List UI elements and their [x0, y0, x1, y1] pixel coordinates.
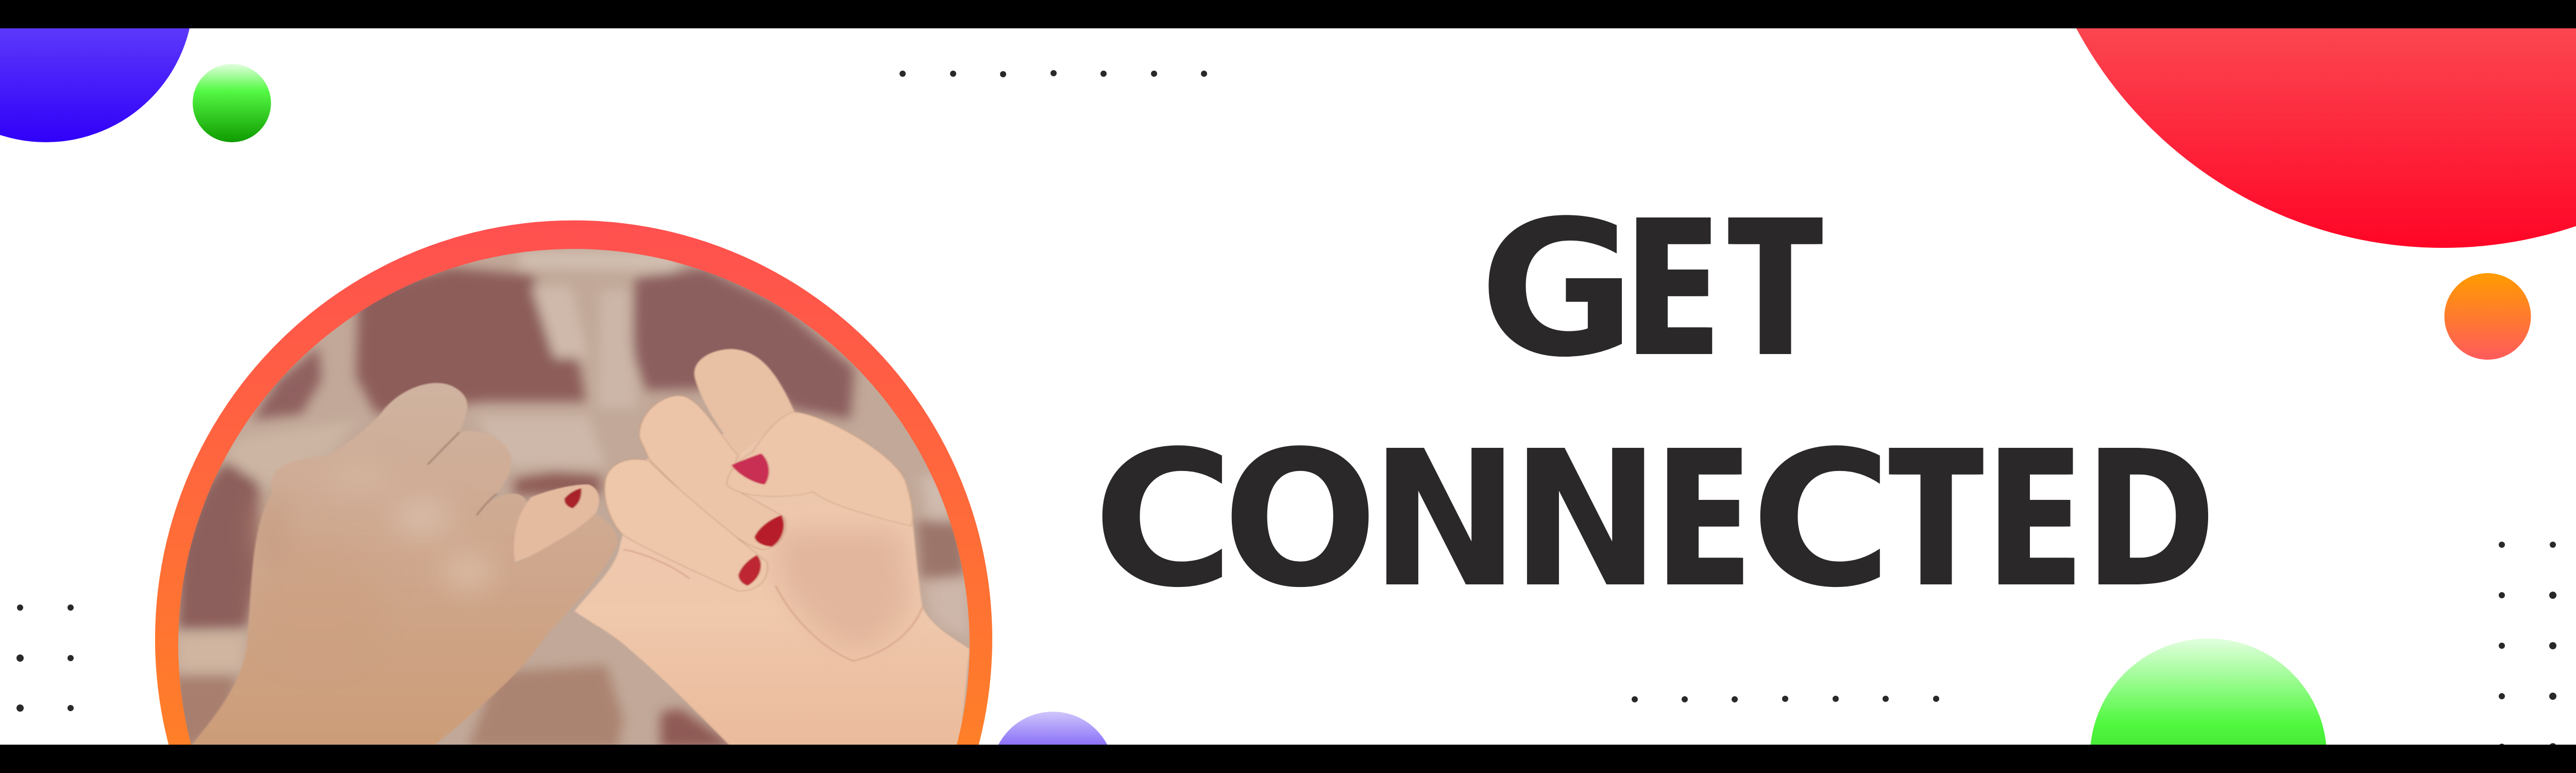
heading line: CONNECTED: C: [1751, 411, 1892, 629]
left hand creases: [428, 432, 497, 515]
heading line: CONNECTED: N: [1370, 411, 1520, 629]
right hand fingers with red nails: [509, 349, 912, 636]
heading line: CONNECTED: T: [1892, 411, 1980, 629]
heading line: CONNECTED: D: [2085, 411, 2215, 629]
lower finger: [605, 459, 768, 591]
right palm shading: [778, 531, 911, 649]
heading line: GET: G: [1479, 180, 1636, 398]
right hand palm and wrist: [574, 412, 970, 748]
heading line: CONNECTED: E: [1989, 411, 2081, 629]
dot grid, bottom right: [2499, 542, 2556, 750]
middle finger: [639, 396, 786, 549]
dot row, top: [900, 70, 1207, 77]
gradient ring around photo: [155, 221, 992, 773]
black bar, top: [0, 0, 2576, 28]
dot grid, bottom left: [16, 604, 74, 712]
heading line: GET: [1479, 180, 1823, 398]
brick wall background: [178, 249, 970, 745]
heading line: GET: T: [1731, 180, 1820, 398]
large green circle, bottom right: [2090, 638, 2327, 773]
dot row, bottom: [1632, 696, 1939, 702]
left hand shading: [247, 498, 492, 593]
nail: thumb: [732, 453, 769, 484]
left pinky hook: [509, 513, 618, 636]
heading line: GET: E: [1627, 180, 1719, 398]
pinky hooked over left hand: [514, 484, 599, 562]
nail: middle finger: [754, 515, 784, 547]
heading line: CONNECTED: [1093, 411, 2215, 629]
title: GET CONNECTED: [1093, 180, 2215, 629]
small green circle, top left: [193, 64, 271, 142]
blue circle, top left: [0, 0, 194, 142]
heading line: CONNECTED: O: [1223, 411, 1378, 629]
left hand with curled fingers: [189, 383, 546, 748]
heading line: CONNECTED: C: [1093, 411, 1234, 629]
small orange circle, right: [2444, 273, 2531, 360]
photo: linked pinky fingers in front of a brick wall: [178, 249, 970, 745]
heading line: CONNECTED: E: [1658, 411, 1750, 629]
heading line: CONNECTED: N: [1511, 411, 1660, 629]
nail: pinky: [565, 488, 582, 508]
thumb: [727, 412, 912, 526]
black bar, bottom: [0, 745, 2576, 773]
large red circle, top right: [2027, 0, 2576, 248]
palm lines: [623, 549, 922, 661]
purple circle, bottom centre: [991, 712, 1114, 773]
upper finger: [694, 349, 794, 456]
nail: lower finger: [738, 555, 761, 586]
